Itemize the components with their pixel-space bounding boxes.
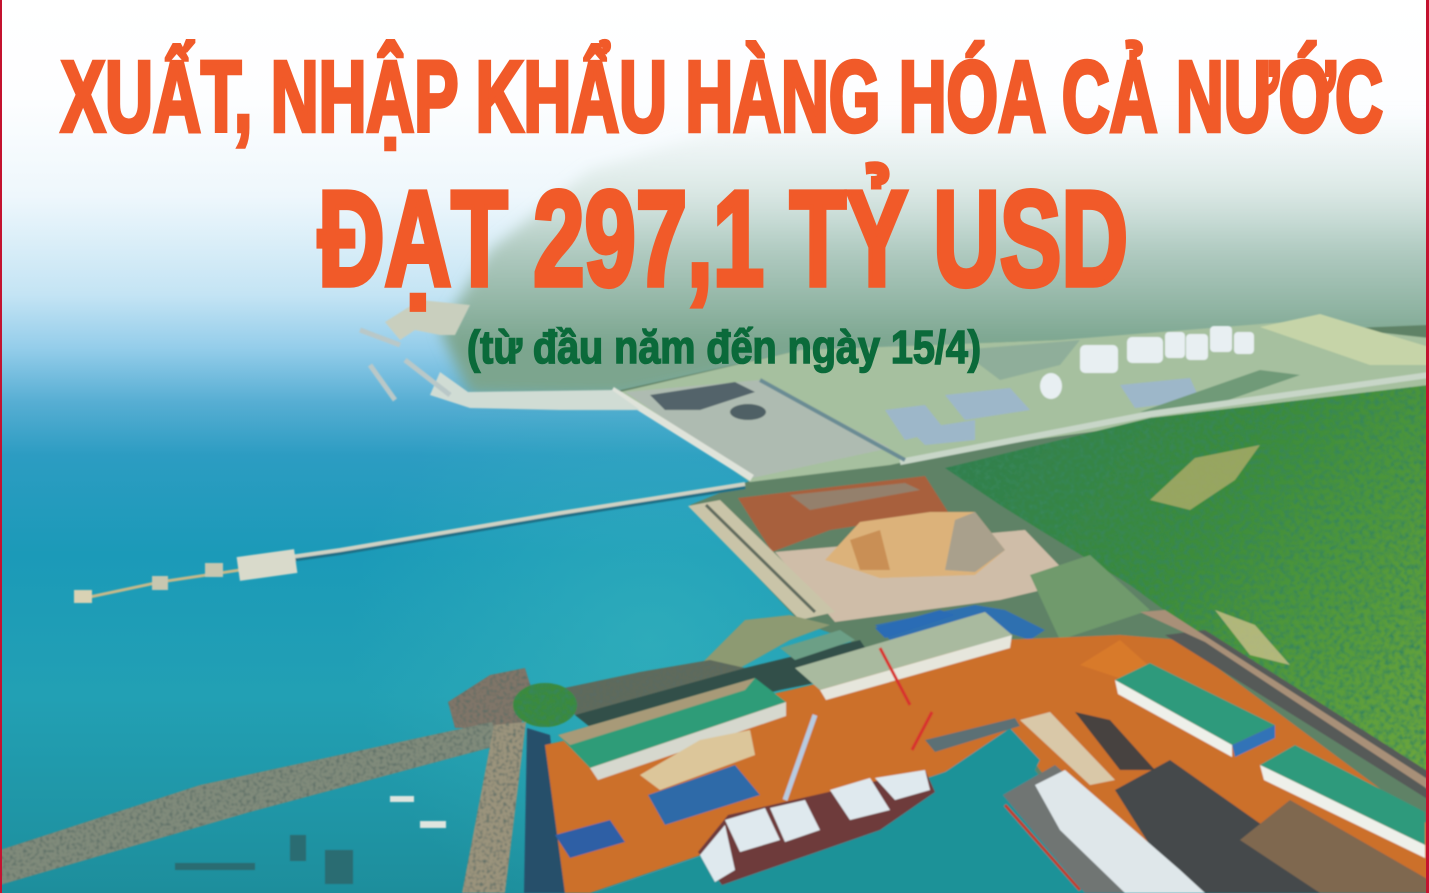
blue cargo area — [875, 605, 1045, 640]
base land behind everything — [612, 325, 1429, 893]
warehouse grey roof — [795, 612, 1012, 700]
warehouse teal roof 2 — [1260, 745, 1425, 858]
blue cargo stacks — [648, 765, 760, 825]
rock outcrop — [448, 668, 535, 728]
coal pile small — [730, 404, 766, 420]
storage tanks — [1040, 326, 1254, 399]
small boats — [390, 796, 446, 828]
pond on red earth — [790, 483, 920, 510]
dark coal stockyard — [1115, 760, 1340, 893]
headland near port — [700, 615, 830, 668]
flat industrial land — [620, 322, 1429, 482]
red crane — [880, 648, 910, 705]
water inlet — [595, 728, 1130, 893]
hazy tree belt — [960, 340, 1080, 380]
bare slope lower — [1215, 610, 1290, 665]
fish cages — [175, 835, 353, 884]
left red border — [0, 0, 2, 893]
small vessels at quay — [925, 718, 1020, 752]
pale yard — [775, 530, 1075, 622]
north shoreline — [430, 372, 640, 410]
port buildings cluster — [1030, 555, 1150, 640]
coastal road — [900, 375, 1429, 462]
dark pile by the quay — [1075, 712, 1155, 770]
containers — [700, 770, 930, 882]
pale field right — [1260, 314, 1429, 365]
orange port apron — [545, 635, 1429, 893]
ship crane — [785, 715, 815, 800]
sea wall — [688, 500, 835, 620]
dock dark strip — [524, 728, 568, 893]
coal yard — [625, 380, 890, 478]
tan road edge — [1140, 610, 1429, 790]
yard edge road — [760, 380, 905, 460]
plant buildings — [885, 378, 1200, 445]
warehouse teal roof 1 — [1115, 663, 1275, 757]
sea-wall dark stripe — [706, 505, 815, 612]
rocky breakwaters on cape — [360, 330, 450, 400]
cargo ship — [1003, 765, 1205, 893]
aerial photo of the port — [0, 300, 1429, 893]
red crane small — [912, 712, 932, 750]
jetty — [74, 484, 745, 603]
warehouse green roof left — [558, 678, 786, 780]
sea glow near the bay — [300, 400, 950, 893]
breakwater to the yard — [612, 390, 752, 478]
rocky shore to the headland — [555, 660, 745, 715]
right red border — [1426, 0, 1429, 893]
coal pile — [650, 382, 755, 410]
green scrub in plant — [1140, 370, 1300, 412]
dark road behind warehouses — [1165, 630, 1429, 800]
date subtitle: (từ đầu năm đến ngày 15/4) — [467, 321, 981, 373]
distant mountain — [440, 90, 1429, 398]
forest hill — [945, 385, 1429, 775]
dark trees behind warehouses — [575, 640, 880, 735]
stone breakwater vertical — [462, 722, 526, 893]
small warehouse — [780, 630, 855, 660]
stone breakwater horizontal — [0, 722, 500, 885]
quay light platform — [1020, 712, 1115, 785]
blue roof strip — [875, 610, 955, 638]
blue cargo lower — [555, 820, 625, 858]
red earth yard — [738, 476, 948, 552]
shadow on apron — [1240, 800, 1429, 893]
green on rocks — [513, 683, 577, 727]
sand heap — [825, 512, 1005, 578]
orange pile — [1080, 640, 1148, 680]
small cape — [385, 300, 470, 340]
container ship hull — [698, 770, 935, 885]
bare hill patch — [1150, 445, 1260, 510]
timber heap — [640, 730, 755, 790]
